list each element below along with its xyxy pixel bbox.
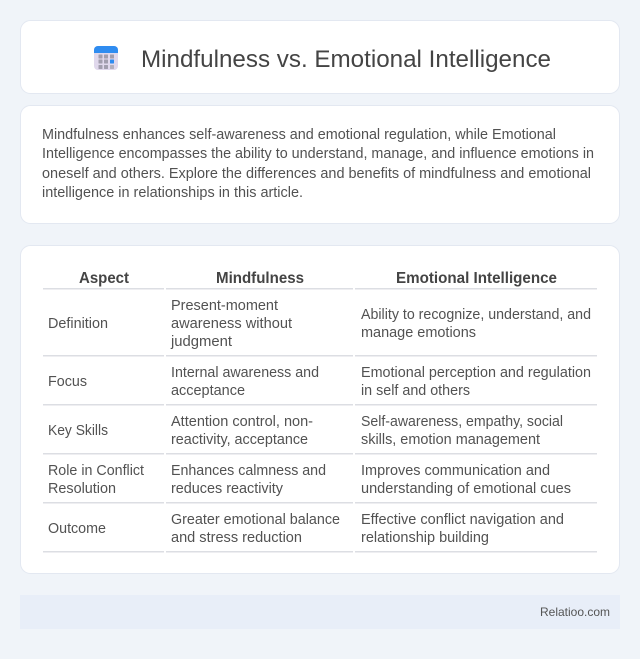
footer <box>20 595 620 629</box>
panel: introduction <box>20 106 620 224</box>
row: focus: Internal awareness and <box>171 365 319 381</box>
row: key skills: Self-awareness, empathy, social <box>361 414 563 430</box>
row: role in conflict resolution: Role in Conflict <box>48 463 144 479</box>
intro text: oneself and others. Explore the differences and benefits of mindfulness and emotional <box>42 166 591 182</box>
row: definition: Present-moment <box>171 298 278 314</box>
row: definition: judgment <box>170 334 232 350</box>
footer brand: Relatioo.com <box>540 605 610 619</box>
row: definition: awareness without <box>171 316 292 332</box>
row: definition: manage emotions <box>361 325 476 341</box>
table header: Mindfulness <box>216 270 304 287</box>
row: key skills: Attention control, non- <box>171 414 313 430</box>
panel: comparison table <box>20 246 620 574</box>
row: outcome: Effective conflict navigation and <box>361 512 564 528</box>
row: definition <box>48 298 591 350</box>
intro text: Mindfulness enhances self-awareness and emotional regulation, while Emotional <box>42 127 556 143</box>
title panel <box>20 20 620 94</box>
row: focus: in self and others <box>361 383 470 399</box>
intro text: Intelligence encompasses the ability to understand, manage, and influence emotions in <box>42 146 594 162</box>
intro text <box>42 127 594 201</box>
row: definition: Ability to recognize, understand, and <box>361 307 591 323</box>
row: role in conflict resolution <box>48 463 571 497</box>
row: role in conflict resolution: Enhances calmness and <box>171 463 326 479</box>
row: outcome: relationship building <box>361 530 489 546</box>
row: focus: Emotional perception and regulation <box>361 365 591 381</box>
row: focus: acceptance <box>171 383 245 399</box>
row: role in conflict resolution: understanding of emotional cues <box>361 481 571 497</box>
row: outcome: Outcome <box>48 521 106 537</box>
row: outcome: and stress reduction <box>171 530 302 546</box>
row: role in conflict resolution: reduces reactivity <box>171 481 284 497</box>
table header: Aspect <box>79 270 129 287</box>
row: focus: Focus <box>48 374 87 390</box>
row: key skills: reactivity, acceptance <box>171 432 308 448</box>
row: focus <box>48 365 591 399</box>
row: key skills: Key Skills <box>48 423 108 439</box>
row: role in conflict resolution: Resolution <box>48 481 116 497</box>
row: key skills: skills, emotion management <box>361 432 540 448</box>
row: outcome: Greater emotional balance <box>171 512 340 528</box>
title: Mindfulness vs. Emotional Intelligence <box>141 46 551 73</box>
intro text: intelligence in relationships in this article. <box>42 185 303 201</box>
table header: Emotional Intelligence <box>396 270 557 287</box>
icon: calendar <box>94 46 118 70</box>
row: role in conflict resolution: Improves communication and <box>361 463 550 479</box>
row: definition: Definition <box>48 316 108 332</box>
row: outcome <box>48 512 564 546</box>
row: key skills <box>48 414 563 448</box>
table header <box>79 270 557 287</box>
